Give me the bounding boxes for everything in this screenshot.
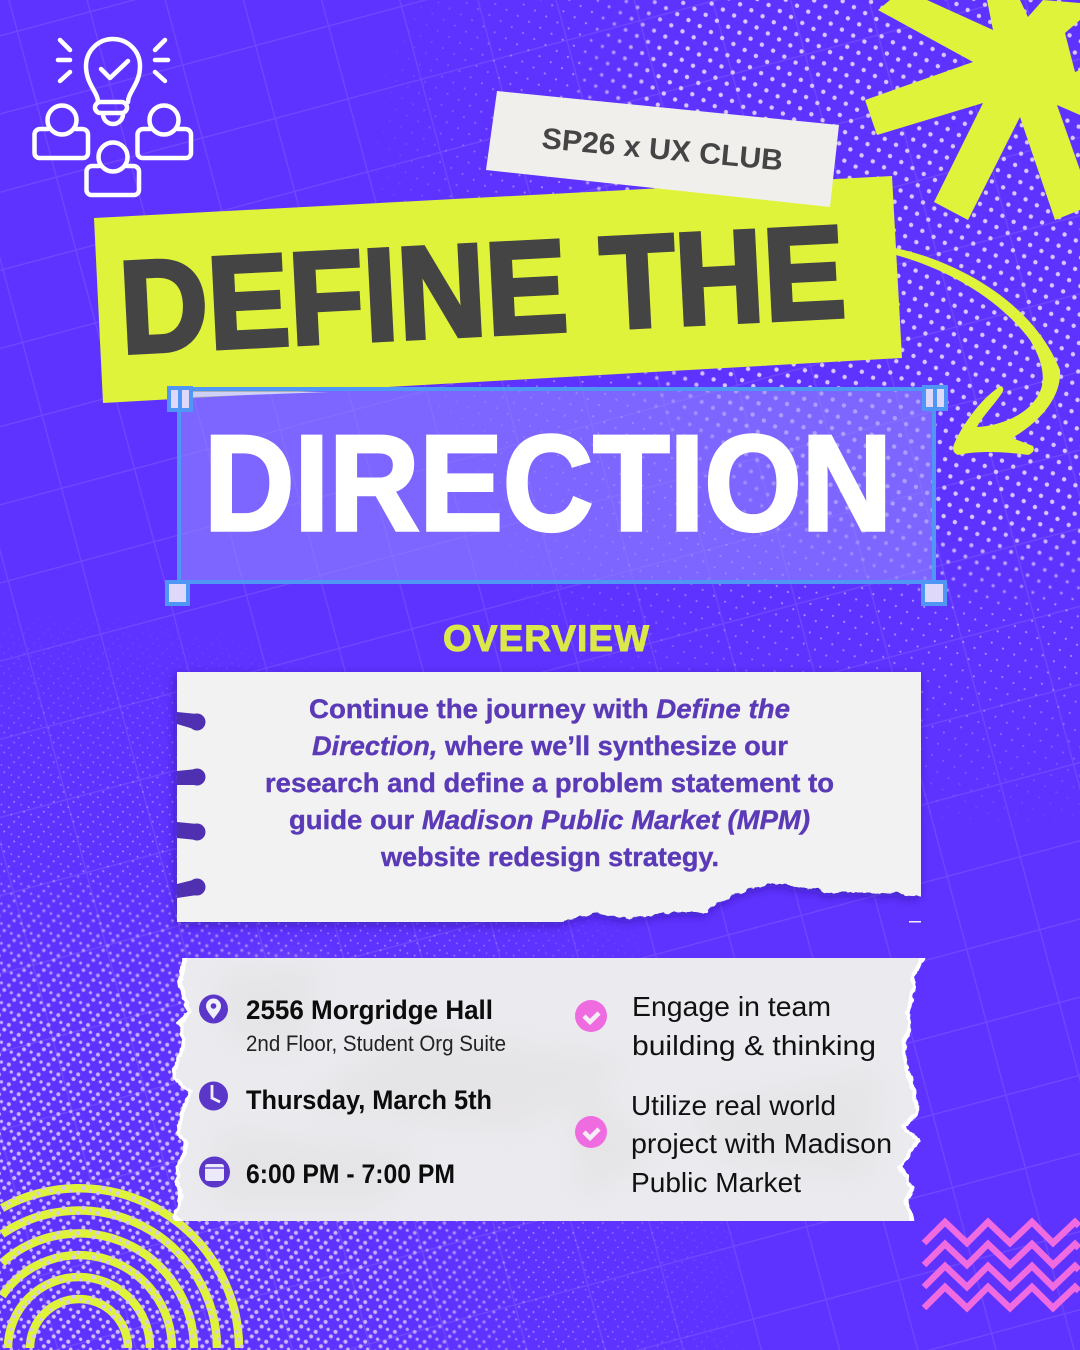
panel: overview paper xyxy=(170,665,930,930)
selection box: direction xyxy=(167,387,946,604)
concentric arcs xyxy=(2,1188,239,1348)
text: benefit two: Public Market xyxy=(631,1167,801,1198)
icon: calendar xyxy=(199,1156,230,1188)
text: date: Thursday, March 5th xyxy=(246,1085,492,1115)
text: benefit two xyxy=(631,1090,892,1198)
overview text: Continue the journey with Define the xyxy=(309,694,790,724)
text: benefit one: building & thinking xyxy=(632,1030,876,1061)
icon: check one xyxy=(575,1000,607,1032)
text: benefit two: project with Madison xyxy=(631,1128,892,1159)
label: club tag: SP26 x UX CLUB xyxy=(540,122,784,177)
zigzag decoration xyxy=(924,1222,1079,1308)
text: time: 6:00 PM - 7:00 PM xyxy=(246,1159,455,1189)
panel: details paper xyxy=(173,950,927,1230)
text: address: 2556 Morgridge Hall xyxy=(246,995,493,1025)
text: floor: 2nd Floor, Student Org Suite xyxy=(246,1031,506,1056)
overview text: Direction, where we’ll synthesize our xyxy=(312,731,788,761)
overview text: research and define a problem statement to xyxy=(265,768,834,798)
text: benefit one: Engage in team xyxy=(632,991,831,1022)
paper crumple xyxy=(210,965,880,1205)
icon: location pin xyxy=(199,994,228,1024)
heading: direction: DIRECTION xyxy=(204,407,892,559)
icon: asterisk xyxy=(865,0,1080,220)
overview text: website redesign strategy. xyxy=(380,842,719,872)
icon: clock xyxy=(199,1082,228,1110)
selection handles xyxy=(167,387,946,604)
overview text xyxy=(265,694,834,872)
text: benefit two: Utilize real world xyxy=(631,1090,836,1121)
heading: overview: OVERVIEW xyxy=(443,618,649,659)
overview text: guide our Madison Public Market (MPM) xyxy=(289,805,810,835)
icon: check two xyxy=(575,1116,607,1148)
yellow title band xyxy=(94,176,902,403)
arrow xyxy=(895,248,1060,455)
label: club tag xyxy=(486,91,839,207)
notebook holes xyxy=(177,712,206,898)
text: benefit one xyxy=(632,991,876,1061)
heading: define the: DEFINE THE xyxy=(116,197,848,381)
icon: lightbulb and team xyxy=(34,39,191,195)
